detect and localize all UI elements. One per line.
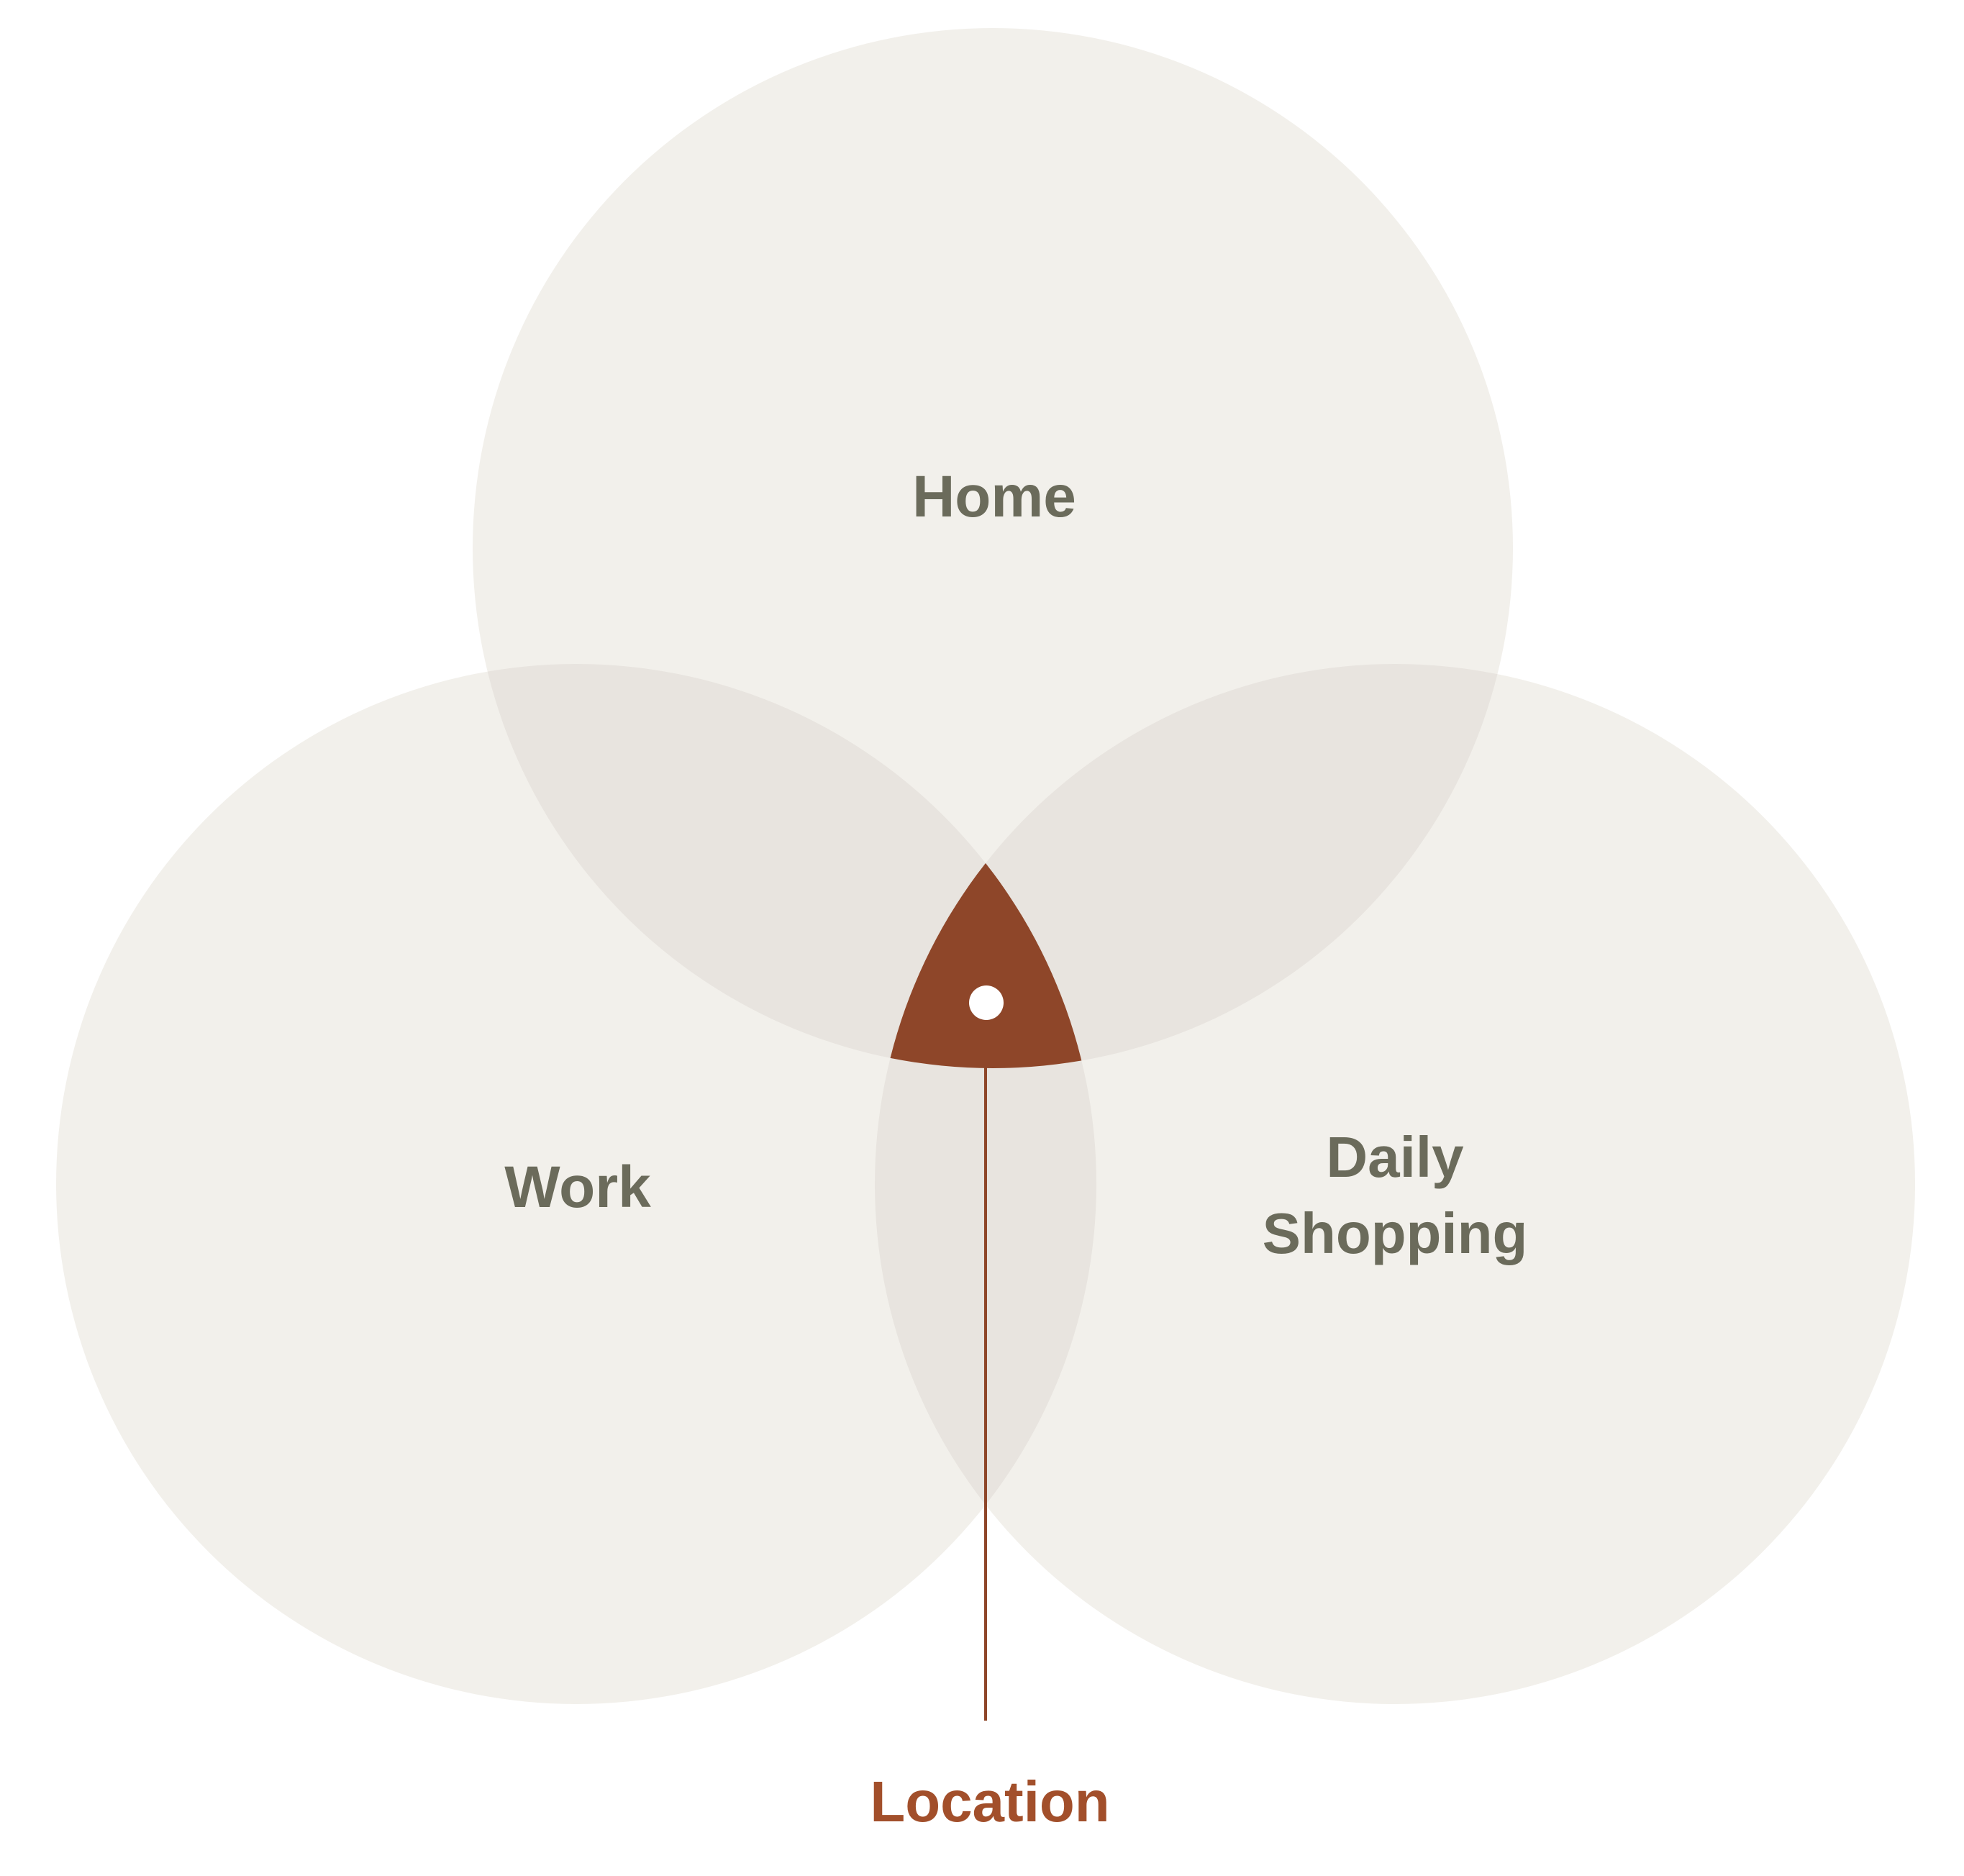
location dot bbox=[969, 985, 1004, 1020]
label: daily shopping: Daily bbox=[1326, 1125, 1464, 1189]
label: work: Work bbox=[504, 1155, 651, 1220]
label: home: Home bbox=[912, 464, 1076, 529]
overlap: work and shopping bbox=[875, 1058, 1096, 1503]
circle: home bbox=[473, 28, 1513, 1068]
label: location: Location bbox=[870, 1770, 1110, 1834]
circle: daily shopping bbox=[875, 664, 1915, 1704]
center intersection: location bbox=[891, 863, 1082, 1068]
connector line bbox=[984, 1003, 987, 1721]
label: daily shopping: Shopping bbox=[1263, 1201, 1527, 1265]
overlap: home and work bbox=[488, 664, 986, 1057]
overlap: home and shopping bbox=[986, 664, 1497, 1060]
circle: work bbox=[56, 664, 1096, 1704]
